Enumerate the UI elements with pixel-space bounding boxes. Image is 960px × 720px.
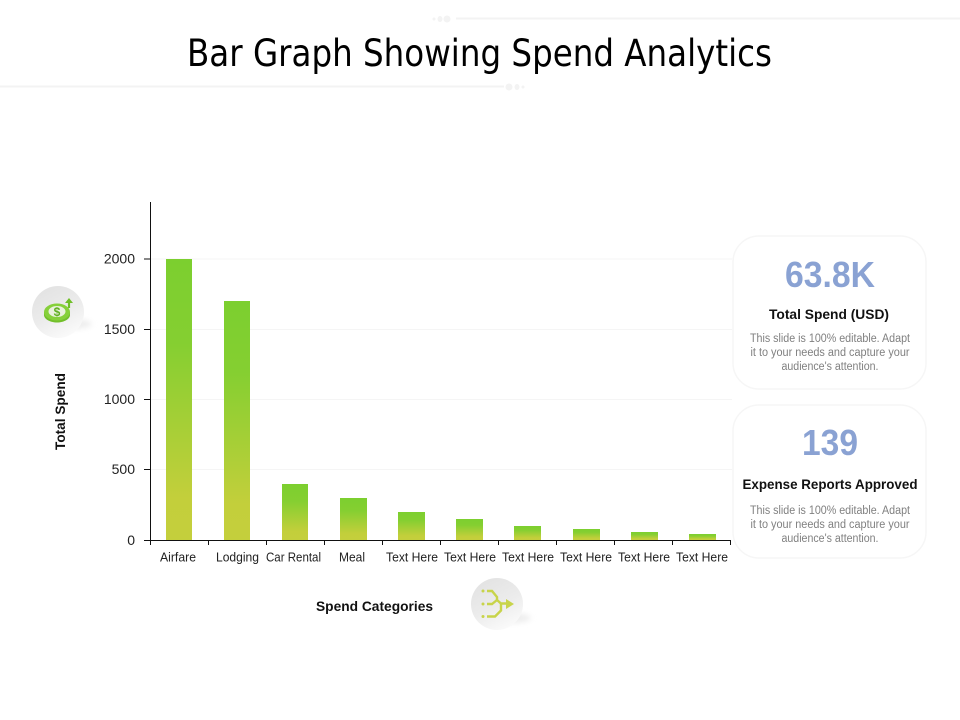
description [750,333,911,373]
value: 63.8K [785,254,875,295]
icon: merging flow arrows [471,578,531,630]
x axis title: Spend Categories [316,598,433,614]
category labels [160,550,728,564]
y axis numbers: 0 [127,532,135,548]
bars [166,259,716,540]
description: This slide is 100% editable. Adapt [750,333,911,345]
description [750,505,911,545]
category labels: Car Rental [266,550,321,564]
category labels: Meal [339,550,365,564]
heading: Total Spend (USD) [769,306,889,322]
header decoration [0,16,960,90]
y axis numbers: 1000 [104,391,135,407]
category labels: Airfare [160,550,196,564]
bar chart [104,202,732,564]
panel: expense reports [733,405,926,558]
description: it to your needs and capture your [750,519,910,531]
description: This slide is 100% editable. Adapt [750,505,911,517]
y axis numbers: 2000 [104,250,135,266]
description: audience's attention. [782,533,878,545]
icon: money with up arrow: $ [54,305,61,319]
axes [144,202,730,545]
title: Bar Graph Showing Spend Analytics [187,32,772,75]
category labels: Text Here [386,550,438,564]
description: audience's attention. [782,361,878,373]
y axis title: Total Spend [52,373,68,450]
value: 139 [802,422,858,463]
panel: total spend [733,236,926,389]
y axis numbers: 1500 [104,321,135,337]
category labels: Text Here [502,550,554,564]
icon: money with up arrow [32,286,92,338]
y axis numbers: 500 [112,461,135,477]
heading: Expense Reports Approved [742,476,918,492]
description: it to your needs and capture your [750,347,910,359]
category labels: Text Here [618,550,670,564]
category labels: Text Here [444,550,496,564]
category labels: Text Here [560,550,612,564]
category labels: Lodging [216,550,259,564]
category labels: Text Here [676,550,728,564]
y axis numbers [104,250,135,548]
